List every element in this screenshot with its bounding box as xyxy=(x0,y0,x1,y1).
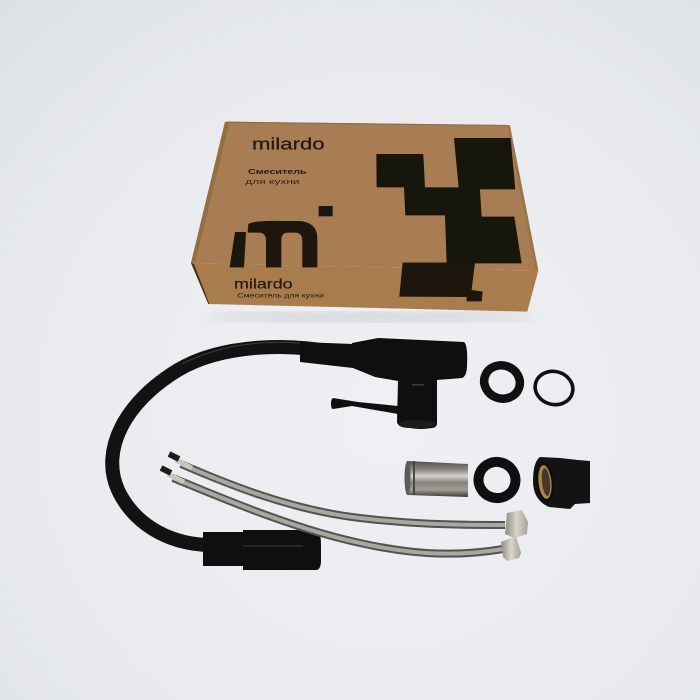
braided hose upper xyxy=(169,454,505,525)
faucet lever xyxy=(331,398,398,414)
thin O-ring xyxy=(531,367,577,409)
box shadow xyxy=(205,312,535,322)
box front brand: milardo xyxy=(234,276,293,292)
braided hose lower xyxy=(161,468,503,554)
box top face xyxy=(191,122,538,271)
mounting nut with brass insert xyxy=(533,457,590,509)
box flap edges xyxy=(191,122,538,304)
rubber washer xyxy=(474,458,520,502)
cardboard box xyxy=(191,122,538,312)
faucet highlight xyxy=(412,384,424,386)
flexible black spout hose xyxy=(112,342,345,545)
box top product title: Смеситель xyxy=(248,167,307,176)
faucet body xyxy=(300,338,467,429)
box front pixel graphic xyxy=(399,263,483,301)
box top pixel graphic xyxy=(376,138,522,263)
box front face xyxy=(191,263,538,312)
lower hex nut xyxy=(501,536,521,561)
steel sleeve xyxy=(404,461,468,497)
spout end nozzle xyxy=(203,530,321,570)
box top brand: milardo xyxy=(252,134,325,153)
upper hex nut xyxy=(505,510,528,538)
large rubber ring xyxy=(479,360,525,404)
box front product name: Смеситель для кухни xyxy=(237,293,324,299)
box top product subtitle: для кухни xyxy=(245,177,300,186)
logo: m with square xyxy=(230,206,333,267)
